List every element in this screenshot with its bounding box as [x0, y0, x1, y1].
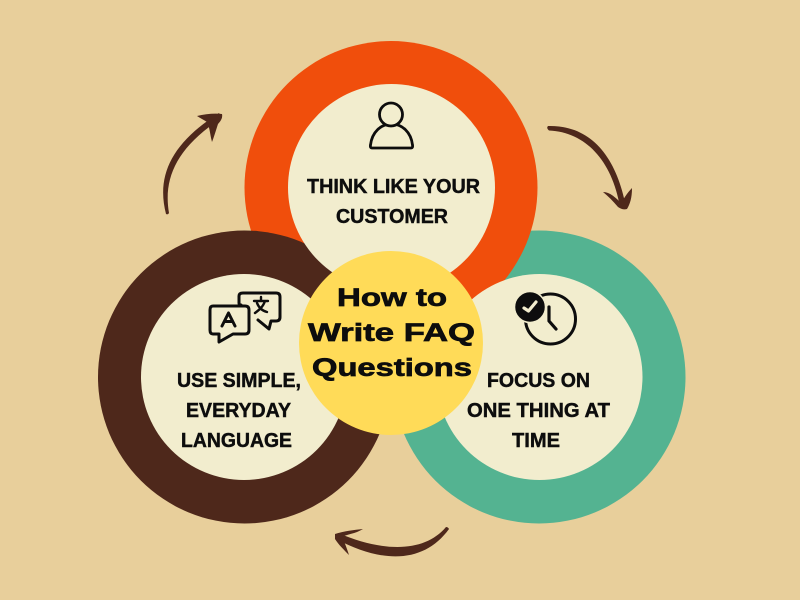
icon: person — [370, 103, 413, 148]
title: Questions — [312, 354, 472, 382]
panel: think like your customer — [288, 84, 495, 291]
title: Write FAQ — [308, 319, 475, 347]
heading: use simple everyday language: EVERYDAY — [186, 400, 292, 422]
heading: focus on one thing at time — [467, 370, 610, 452]
heading: focus on one thing at time: FOCUS ON — [487, 370, 590, 392]
heading: think like your customer: THINK LIKE YOUR — [307, 176, 481, 198]
arrow: bottom — [335, 527, 449, 556]
arrow: upper left — [163, 113, 222, 214]
ring: orange circle — [244, 41, 538, 334]
heading: think like your customer — [307, 176, 481, 228]
icon: clock with check — [514, 292, 576, 344]
heading: use simple everyday language: USE SIMPLE, — [177, 370, 301, 392]
heading: think like your customer: CUSTOMER — [336, 206, 449, 228]
arrow: upper right — [547, 126, 632, 209]
heading: focus on one thing at time: TIME — [512, 430, 560, 452]
title — [308, 284, 475, 382]
panel: focus on one thing at time — [436, 274, 642, 480]
center circle: title — [299, 251, 483, 435]
heading: use simple everyday language: LANGUAGE — [181, 430, 292, 452]
heading: use simple everyday language — [177, 370, 301, 452]
heading: focus on one thing at time: ONE THING AT — [467, 400, 610, 422]
ring: teal circle — [392, 230, 686, 524]
panel: use simple everyday language — [141, 274, 347, 480]
title: How to — [337, 284, 447, 312]
ring: brown circle — [98, 230, 391, 524]
icon: translation speech bubbles — [210, 293, 280, 342]
